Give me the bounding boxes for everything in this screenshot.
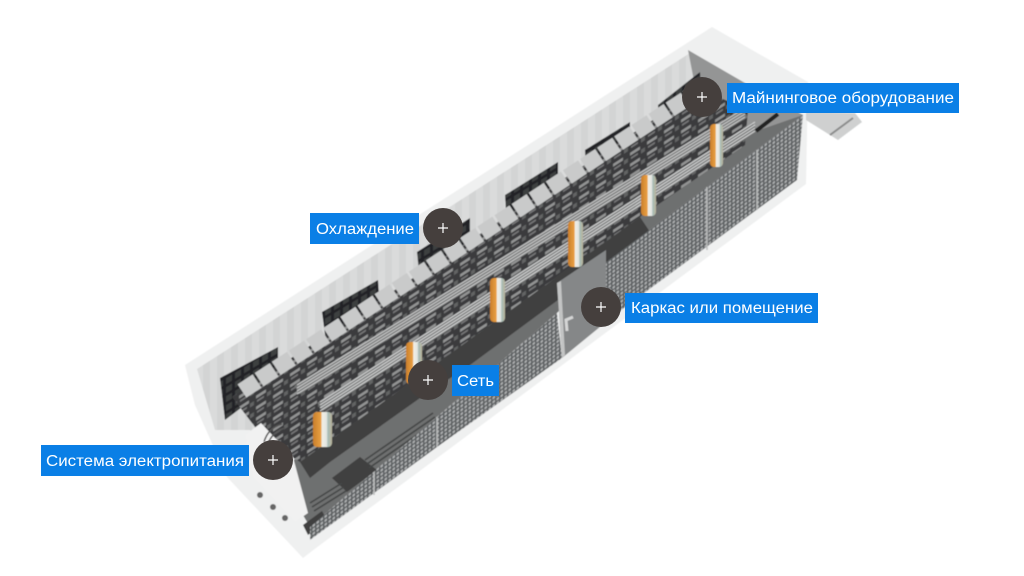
mining racks	[232, 87, 755, 462]
door	[557, 250, 606, 358]
miner tops: back row	[242, 87, 704, 391]
hotspot: frame or room	[581, 287, 818, 327]
hotspot: mining equipment	[682, 77, 959, 117]
hotspot: network	[408, 360, 499, 400]
hotspot: power system	[41, 440, 293, 480]
mesh panel dividers	[374, 150, 757, 495]
network cable columns	[313, 124, 723, 447]
back wall	[197, 53, 745, 480]
panel: container body	[185, 27, 808, 558]
scene: container illustration	[185, 27, 862, 558]
floor shadows	[300, 217, 650, 535]
hotspot: frame or room: Каркас или помещение	[631, 300, 813, 317]
far end interior	[688, 50, 803, 152]
floor cable stripes	[310, 413, 437, 511]
front mesh wall: right	[605, 115, 803, 322]
hotspot: network: Сеть	[457, 373, 494, 390]
cable tray: rear base	[297, 113, 745, 390]
door handle	[566, 317, 573, 331]
hotspot: mining equipment: Майнинговое оборудование	[732, 90, 954, 107]
cable tray: front lines	[320, 122, 755, 411]
cable tray: rear lines	[297, 108, 745, 394]
hotspot: power system: Система электропитания	[46, 453, 244, 470]
cable tray: front base	[320, 127, 755, 407]
floor	[280, 115, 803, 527]
hotspot: cooling	[310, 208, 463, 248]
far end bar	[756, 114, 778, 131]
hatch at far end	[806, 112, 862, 140]
cooling vents	[220, 72, 702, 420]
hotspot: cooling: Охлаждение	[316, 221, 414, 238]
front mesh wall: left	[310, 313, 562, 540]
rack mass	[232, 89, 748, 462]
container outer frame	[185, 27, 808, 558]
power cabinet	[245, 423, 308, 522]
